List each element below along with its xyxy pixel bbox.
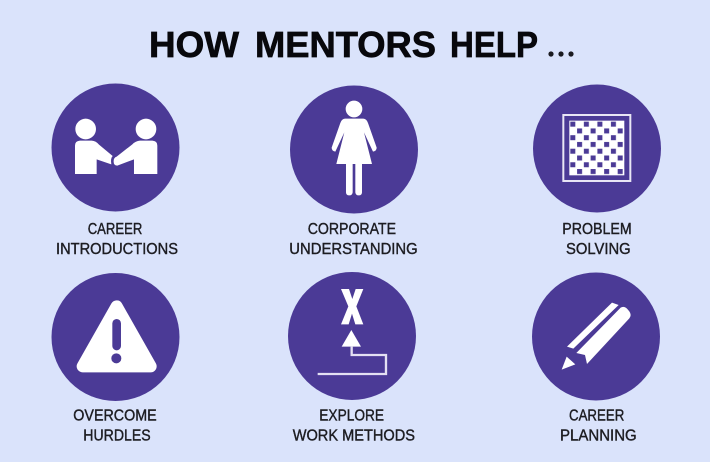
title — [149, 24, 574, 65]
label: overcome hurdles: OVERCOME — [73, 408, 157, 425]
label: overcome hurdles: HURDLES — [83, 428, 151, 445]
icon: warning triangle — [52, 273, 180, 401]
label: corporate understanding: CORPORATE — [308, 221, 396, 238]
label: career planning: PLANNING — [560, 428, 637, 445]
panel: overcome hurdles — [52, 273, 180, 445]
panel: career introductions — [52, 84, 180, 258]
label: career planning — [560, 408, 637, 445]
panel: corporate understanding — [289, 86, 418, 258]
panel: explore work methods — [288, 272, 416, 445]
label: problem solving: PROBLEM — [562, 221, 632, 238]
icon: path arrow to X — [288, 272, 416, 400]
title: HELP — [450, 24, 538, 65]
icon: chessboard — [533, 84, 661, 212]
icon: handshake — [52, 84, 180, 212]
title: HOW — [149, 24, 239, 65]
title: MENTORS — [255, 24, 436, 65]
label: career introductions: INTRODUCTIONS — [56, 241, 178, 258]
panel: career planning — [532, 272, 660, 445]
icon: pencil — [532, 272, 660, 400]
label: career introductions — [56, 221, 178, 258]
label: problem solving — [562, 221, 632, 258]
label: corporate understanding: UNDERSTANDING — [289, 241, 418, 258]
label: career planning: CAREER — [569, 408, 624, 425]
label: overcome hurdles — [73, 408, 157, 445]
label: corporate understanding — [289, 221, 418, 258]
label: career introductions: CAREER — [88, 221, 142, 238]
label: problem solving: SOLVING — [566, 241, 631, 258]
icon: woman figure — [290, 86, 418, 214]
label: explore work methods: WORK METHODS — [293, 428, 415, 445]
label: explore work methods — [293, 408, 415, 445]
label: explore work methods: EXPLORE — [319, 408, 384, 425]
panel: problem solving — [533, 84, 661, 258]
